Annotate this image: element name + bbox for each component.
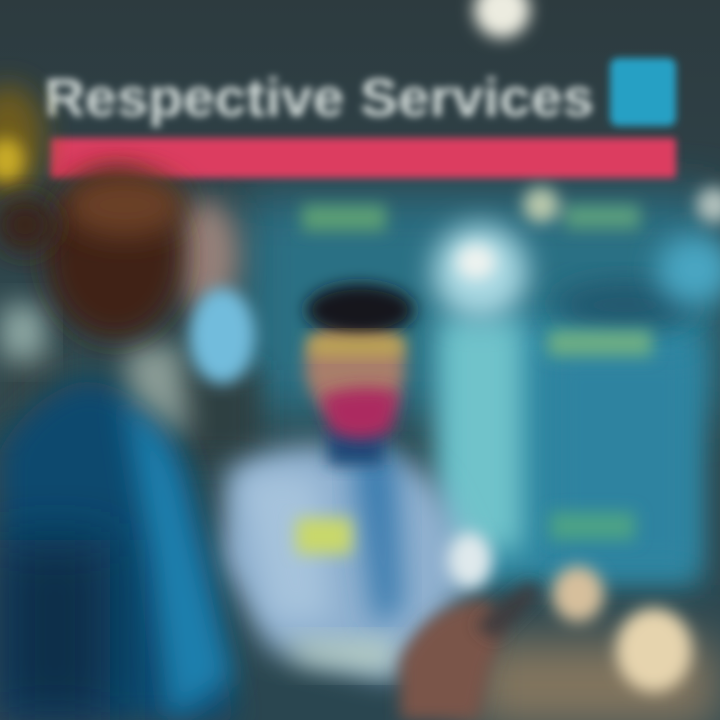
face (305, 318, 405, 418)
hair (306, 284, 414, 336)
person: foreground woman (0, 85, 255, 720)
title banner (50, 138, 676, 178)
body (0, 380, 235, 720)
hair (45, 170, 185, 340)
left yellow object (0, 85, 44, 195)
face (171, 200, 239, 310)
panel: service board (432, 224, 720, 585)
neck (328, 425, 384, 465)
coat (220, 446, 480, 680)
neck (125, 345, 190, 440)
glowing lamps (552, 566, 692, 692)
title: Respective Services (44, 68, 594, 128)
mask (320, 388, 400, 439)
green labels (302, 187, 720, 540)
hand holding phone (400, 582, 542, 720)
ceiling light (474, 0, 530, 38)
eye band (308, 336, 404, 356)
mask (189, 288, 255, 384)
icon: blue square (610, 58, 676, 126)
person: clinician (220, 284, 492, 680)
badge (296, 518, 352, 554)
